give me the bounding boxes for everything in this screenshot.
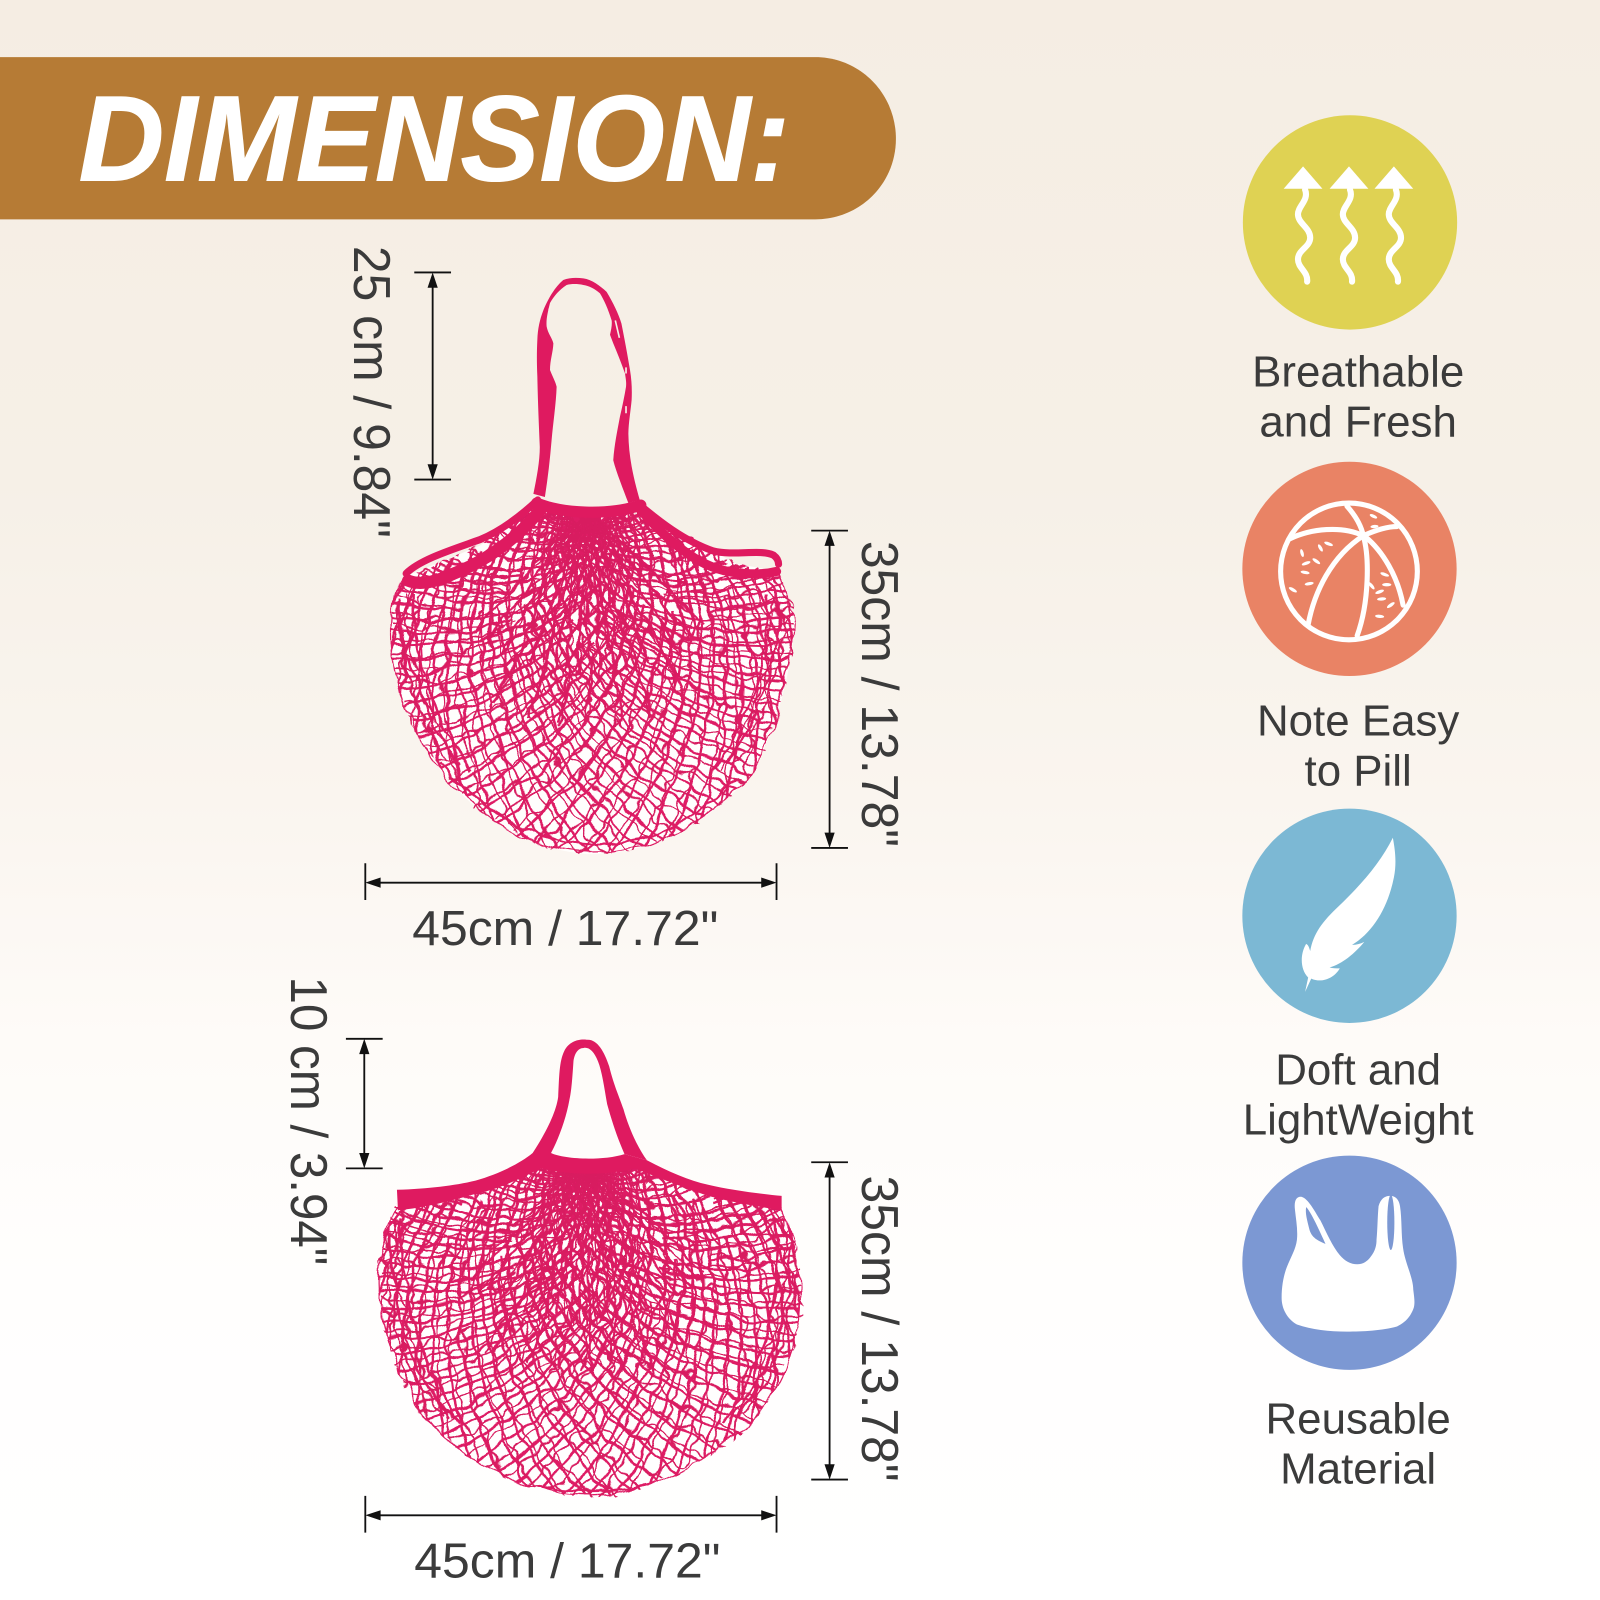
feature: soft and lightweight xyxy=(1242,809,1474,1145)
dimension: large bag width xyxy=(365,863,777,956)
feature: note easy to pill xyxy=(1242,462,1459,796)
label line 2: to Pill xyxy=(1305,747,1412,796)
feature: breathable and fresh xyxy=(1243,115,1464,447)
large bag: pink mesh with long handle xyxy=(390,278,796,854)
mesh body xyxy=(376,1168,803,1497)
dimension: large bag body height: 35cm / 13.78" xyxy=(850,541,908,847)
doubled mesh strands xyxy=(392,508,794,854)
feature: reusable material xyxy=(1242,1156,1457,1494)
long handle xyxy=(533,278,640,503)
dimension: large bag handle height: 25 cm / 9.84" xyxy=(342,246,400,538)
mesh body xyxy=(390,510,796,854)
label: Reusable xyxy=(1266,1395,1451,1444)
small bag: pink mesh with short handle xyxy=(376,1040,804,1498)
icon: feather xyxy=(1302,838,1395,992)
label: Breathable xyxy=(1252,348,1464,397)
dimension: large bag body height xyxy=(811,531,908,848)
white bag interior xyxy=(392,507,795,854)
dimension: small bag body height: 35cm / 13.78" xyxy=(850,1176,908,1482)
label: Note Easy xyxy=(1257,697,1459,746)
label line 2: and Fresh xyxy=(1259,398,1457,447)
icon: ball with grains xyxy=(1281,503,1417,640)
dimension: large bag width: 45cm / 17.72" xyxy=(412,902,718,956)
white bag interior xyxy=(378,1163,801,1497)
label: Doft and xyxy=(1275,1046,1441,1095)
label line 2: Material xyxy=(1280,1445,1436,1494)
top band xyxy=(397,1153,782,1210)
icon: rising air arrows xyxy=(1284,166,1413,282)
doubled mesh strands xyxy=(377,1168,804,1498)
icon: shopping bag xyxy=(1282,1195,1414,1332)
handle strand gaps xyxy=(549,305,626,413)
short handle xyxy=(533,1040,647,1160)
dimension: small bag width xyxy=(365,1496,777,1589)
dimension: small bag body height xyxy=(811,1162,908,1482)
dimension: small bag handle height: 10 cm / 3.94" xyxy=(279,977,337,1265)
title banner xyxy=(0,57,896,219)
top band xyxy=(406,500,779,583)
dimension: large bag handle height xyxy=(342,246,451,538)
label line 2: LightWeight xyxy=(1243,1096,1474,1145)
dimension: small bag handle height xyxy=(279,977,383,1265)
heading: DIMENSION: DIMENSION: xyxy=(79,71,790,207)
dimension: small bag width: 45cm / 17.72" xyxy=(414,1535,720,1589)
